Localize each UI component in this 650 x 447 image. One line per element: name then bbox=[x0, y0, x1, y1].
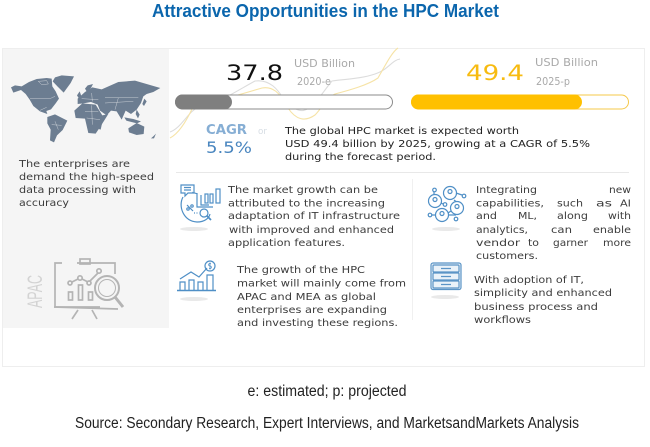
metric: 2025 value: 49.4 bbox=[466, 61, 524, 85]
metric: 2025 value: 2025-p bbox=[536, 76, 570, 88]
text: new capabilities: customers. bbox=[476, 251, 538, 262]
text: IT adoption: With adoption of IT, bbox=[474, 275, 584, 286]
icon: analytics bbox=[181, 185, 220, 222]
metric: 2020 value: 37.8 bbox=[226, 61, 283, 85]
icon: growth chart bbox=[177, 261, 216, 290]
text: IT adoption: workflows bbox=[474, 315, 531, 326]
text: new capabilities: garner bbox=[553, 238, 589, 249]
text: IT adoption: business process and bbox=[474, 302, 598, 313]
text: new capabilities: to bbox=[528, 238, 539, 249]
icon: world map bbox=[11, 75, 160, 142]
metric: CAGR: or bbox=[258, 127, 267, 137]
metric: CAGR: CAGR bbox=[206, 123, 247, 138]
text: new capabilities: with bbox=[608, 211, 631, 222]
text: new capabilities: as bbox=[596, 198, 612, 210]
text: enterprises statement: data processing with bbox=[19, 185, 136, 196]
text: new capabilities: new bbox=[609, 185, 631, 196]
text: market growth: application features. bbox=[228, 238, 345, 249]
text: new capabilities: enable bbox=[593, 225, 631, 236]
text: IT adoption bbox=[474, 275, 612, 326]
metric: 2020 value bbox=[226, 58, 355, 88]
metric: 2025 value: USD Billion bbox=[535, 57, 598, 69]
text: new capabilities: capabilities, bbox=[476, 198, 544, 210]
text: new capabilities: AI bbox=[620, 198, 631, 210]
text: regional growth bbox=[236, 265, 406, 329]
icon: server stack bbox=[431, 263, 461, 290]
text: enterprises statement: accuracy bbox=[19, 198, 69, 209]
text: market growth bbox=[227, 185, 400, 249]
footnote: source: Source: Secondary Research, Expert Interviews, and MarketsandMarkets Analysis bbox=[75, 415, 579, 432]
text: regional growth: and investing these regions. bbox=[237, 318, 398, 329]
text: regional growth: The growth of the HPC bbox=[236, 265, 365, 276]
text: new capabilities: along bbox=[557, 211, 588, 222]
text: regional growth: market will mainly come from bbox=[237, 278, 406, 290]
text: market growth: The market growth can be bbox=[227, 185, 378, 196]
icon shadow bbox=[431, 295, 459, 299]
metric: 2025 value bbox=[466, 57, 598, 88]
icon shadow bbox=[432, 227, 460, 231]
text: market summary bbox=[284, 126, 590, 163]
text: market growth: attributed to the increasing bbox=[228, 198, 385, 210]
text: enterprises statement: demand the high-speed bbox=[19, 172, 154, 183]
panel: main frame bbox=[2, 48, 644, 366]
metric: 2020 value: 2020-e bbox=[297, 76, 331, 88]
icon shadow bbox=[180, 297, 208, 301]
metric: CAGR: 5.5% bbox=[206, 138, 252, 157]
metric: 2020 value: USD Billion bbox=[294, 58, 355, 70]
bar: 2025 market size bbox=[411, 94, 628, 110]
text: market summary: during the forecast period. bbox=[285, 152, 436, 163]
label: APAC: APAC bbox=[24, 275, 47, 308]
text: enterprises statement: The enterprises are bbox=[18, 159, 130, 170]
metric: CAGR bbox=[206, 123, 267, 157]
text: new capabilities: Integrating bbox=[476, 185, 537, 196]
text: enterprises statement bbox=[18, 159, 154, 209]
text: new capabilities: ML, bbox=[518, 211, 537, 222]
text: regional growth: APAC and MEA as global bbox=[237, 292, 376, 303]
text: new capabilities: vendor bbox=[476, 238, 521, 249]
title: Attractive Opportunities in the HPC Market bbox=[152, 1, 499, 21]
panel: global overview bbox=[3, 49, 169, 328]
text: market growth: adaptation of IT infrastructure bbox=[228, 211, 400, 222]
icon shadow bbox=[180, 227, 208, 231]
text: new capabilities bbox=[476, 185, 631, 262]
bar: 2020 market size bbox=[175, 94, 392, 110]
text: market summary: USD 49.4 billion by 2025, growing at a CAGR of 5.5% bbox=[285, 139, 590, 150]
text: regional growth: enterprises are expanding bbox=[237, 305, 387, 316]
text: market growth: with improved and enhanced bbox=[229, 225, 394, 236]
text: new capabilities: can bbox=[551, 225, 572, 236]
icon: connected people bbox=[428, 186, 466, 222]
footnote: legend: e: estimated; p: projected bbox=[248, 383, 406, 400]
text: new capabilities: such bbox=[557, 198, 583, 210]
text: IT adoption: simplicity and enhanced bbox=[474, 288, 612, 299]
text: new capabilities: and bbox=[476, 211, 497, 222]
text: new capabilities: analytics, bbox=[476, 225, 528, 236]
icon: presentation board with magnifier bbox=[54, 259, 123, 319]
decorative trend lines bbox=[170, 48, 400, 138]
text: market summary: The global HPC market is expected worth bbox=[284, 126, 519, 137]
text: new capabilities: more bbox=[603, 238, 631, 249]
